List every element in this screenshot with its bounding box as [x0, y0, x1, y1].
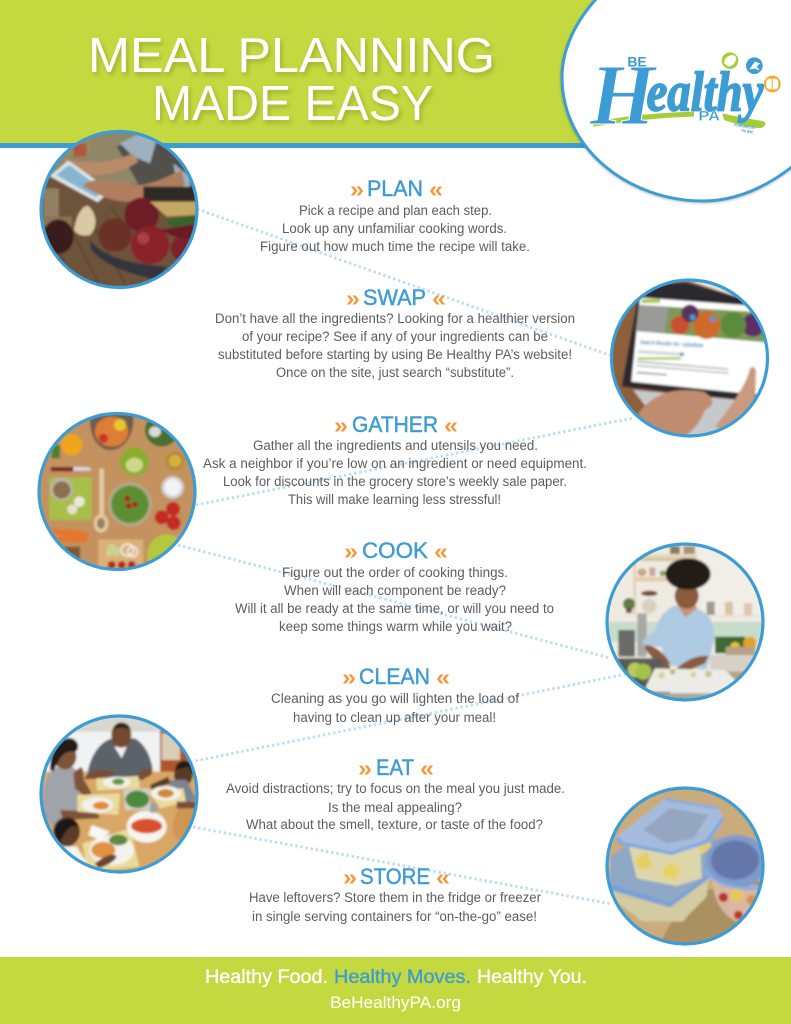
title	[88, 29, 495, 131]
heading: clean: «	[436, 664, 450, 690]
heading: eat: »	[358, 755, 372, 781]
heading: gather: »	[334, 412, 348, 438]
dotted connector lines	[178, 209, 633, 904]
text: clean instructions	[271, 691, 519, 725]
footer tagline: Healthy Food.	[205, 966, 328, 988]
heading: eat: «	[420, 755, 434, 781]
heading: plan: «	[429, 176, 443, 202]
heading: cook: «	[434, 538, 448, 564]
heading: cook: »	[344, 538, 358, 564]
title: MADE EASY	[152, 77, 433, 131]
text: swap instructions: substituted before starting by using Be Healthy PA’s website!	[218, 347, 572, 362]
text: swap instructions: Don’t have all the ingredients? Looking for a healthier version	[215, 311, 575, 326]
logo badge	[562, 0, 791, 201]
text: eat instructions: Is the meal appealing?	[328, 800, 462, 815]
text: gather instructions: Look for discounts in the grocery store’s weekly sale paper.	[223, 474, 567, 489]
footer website: BeHealthyPA.org	[330, 993, 461, 1012]
heading: store: STORE	[360, 864, 430, 889]
photo: tablet showing website search: Search Results for: substitute	[640, 340, 704, 349]
text: eat instructions: Avoid distractions; try to focus on the meal you just made.	[226, 781, 565, 796]
heading: swap: »	[346, 285, 360, 311]
photo: ingredients laid out on a table	[33, 410, 200, 577]
logo: Be Healthy PA: BE	[627, 54, 647, 70]
heading: store	[343, 864, 450, 890]
text: store instructions: Have leftovers? Store them in the fridge or freezer	[249, 890, 541, 905]
text: gather instructions	[203, 438, 587, 507]
logo: Be Healthy PA: PA WIC	[741, 129, 754, 135]
heading: swap: «	[432, 285, 446, 311]
photo: tablet showing website search	[607, 277, 773, 443]
text: plan instructions: Pick a recipe and plan each step.	[299, 203, 492, 218]
logo: Be Healthy PA: ealthy	[647, 62, 764, 124]
photo: family eating together	[40, 713, 200, 875]
text: swap instructions	[215, 311, 575, 380]
text: gather instructions: Ask a neighbor if you’re low on an ingredient or need equipment.	[203, 456, 587, 471]
text: cook instructions	[235, 565, 554, 634]
heading: gather: «	[444, 412, 458, 438]
photo: planning at a table	[39, 130, 199, 290]
text: eat instructions	[226, 781, 565, 832]
text: plan instructions: Figure out how much time the recipe will take.	[260, 239, 530, 254]
step: eat	[226, 755, 565, 832]
text: swap instructions: Once on the site, just search “substitute”.	[276, 365, 514, 380]
footer tagline: Healthy You.	[477, 966, 587, 988]
logo: Be Healthy PA: PA	[698, 108, 720, 124]
logo: Be Healthy PA	[589, 46, 781, 143]
text: store instructions: in single serving containers for “on-the-go” ease!	[252, 909, 537, 924]
text: plan instructions	[260, 203, 530, 254]
step: plan	[260, 176, 530, 254]
heading: cook	[344, 538, 448, 564]
text: clean instructions: Cleaning as you go will lighten the load of	[271, 691, 519, 706]
header band	[0, 0, 791, 148]
heading: clean	[342, 664, 450, 690]
step: cook	[235, 538, 554, 634]
heading: gather: GATHER	[352, 412, 438, 437]
footer tagline: Healthy Moves.	[334, 966, 471, 988]
text: clean instructions: having to clean up after your meal!	[293, 710, 496, 725]
text: plan instructions: Look up any unfamiliar cooking words.	[282, 221, 507, 236]
heading: eat	[358, 755, 434, 781]
footer band	[0, 957, 791, 1024]
title: MEAL PLANNING	[88, 29, 495, 83]
heading: plan: »	[350, 176, 364, 202]
footer tagline	[205, 966, 587, 988]
heading: plan: PLAN	[367, 176, 423, 201]
step: store	[249, 864, 541, 924]
heading: plan	[350, 176, 443, 202]
logo: Be Healthy PA: H	[589, 46, 658, 143]
text: swap instructions: of your recipe? See if any of your ingredients can be	[242, 329, 548, 344]
text: store instructions	[249, 890, 541, 924]
heading: eat: EAT	[376, 755, 414, 780]
heading: clean: CLEAN	[359, 664, 430, 689]
text: cook instructions: Figure out the order of cooking things.	[282, 565, 508, 580]
heading: clean: »	[342, 664, 356, 690]
heading: cook: COOK	[362, 538, 428, 563]
text: eat instructions: What about the smell, texture, or taste of the food?	[246, 817, 543, 832]
photo: leftovers in storage containers	[603, 785, 770, 952]
text: cook instructions: Will it all be ready at the same time, or will you need to	[235, 601, 554, 616]
text: gather instructions: This will make learning less stressful!	[288, 492, 501, 507]
heading: store: «	[436, 864, 450, 890]
heading: store: »	[343, 864, 357, 890]
step: gather	[203, 412, 587, 507]
heading: swap: SWAP	[363, 285, 426, 310]
logo: Be Healthy PA: POWERED BY	[734, 123, 757, 131]
step: swap	[215, 285, 575, 380]
step: clean	[271, 664, 519, 725]
text: cook instructions: When will each component be ready?	[284, 583, 506, 598]
text: gather instructions: Gather all the ingredients and utensils you need.	[253, 438, 538, 453]
photo: woman cooking in a kitchen	[603, 540, 770, 707]
heading: swap	[346, 285, 446, 311]
text: cook instructions: keep some things warm while you wait?	[279, 619, 512, 634]
